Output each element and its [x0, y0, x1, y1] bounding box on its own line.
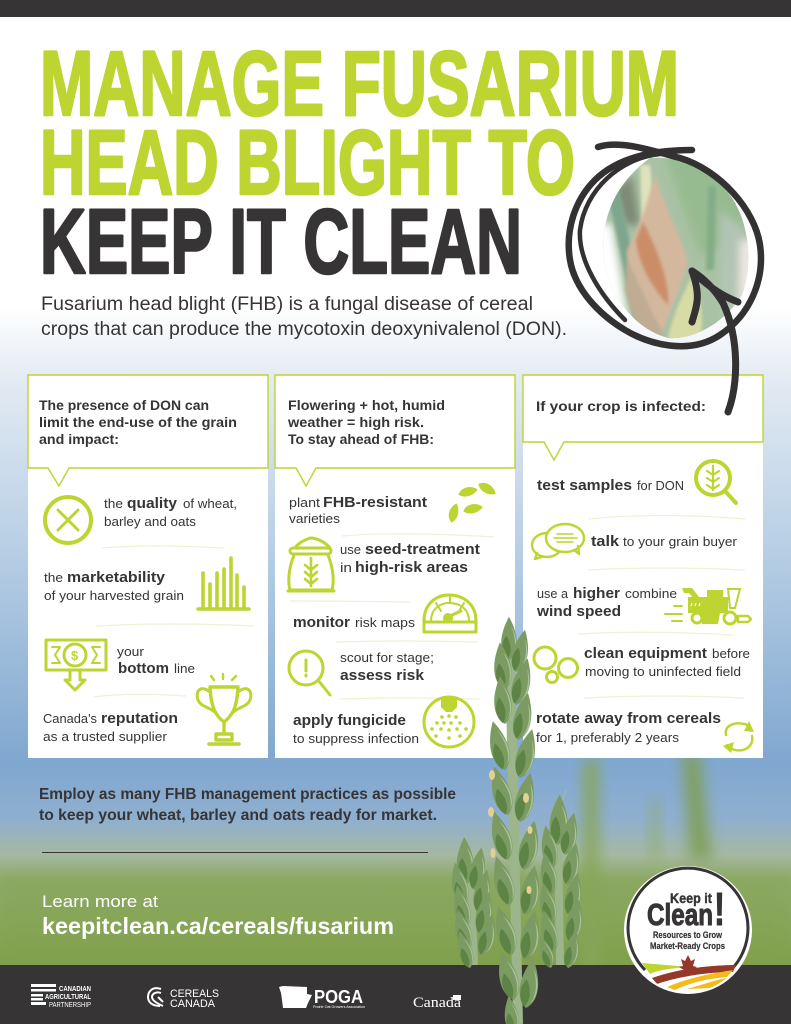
text: marketability: of your harvested grain [44, 588, 184, 603]
header text: If your crop is infected: [536, 398, 706, 414]
text: seed treatment [340, 541, 480, 576]
badge text: ! [714, 883, 725, 935]
closing statement: Employ as many FHB management practices as possible [39, 786, 456, 803]
text: resistant varieties: FHB-resistant [323, 494, 427, 511]
icon: magnifier with wheat [696, 461, 736, 503]
header text: Flowering + hot, humid [288, 397, 445, 413]
intro text [41, 294, 567, 340]
closing statement [39, 786, 456, 824]
footer logo: Canada wordmark: Canada [413, 995, 461, 1011]
text: reputation: reputation [101, 710, 178, 727]
hand-drawn circle [569, 145, 761, 346]
text: combine: higher [573, 585, 620, 602]
learn more link [42, 892, 394, 939]
intro text: crops that can produce the mycotoxin deoxynivalenol (DON). [41, 319, 567, 340]
text: bottom line [117, 644, 195, 677]
text: seed treatment: high-risk areas [355, 559, 468, 576]
icon: maple leaf [679, 955, 697, 970]
text: talk [591, 533, 738, 550]
badge: Keep it Clean [624, 866, 752, 994]
text: seed treatment: use [340, 542, 361, 557]
wheat spike: right [535, 790, 587, 970]
photo: infected wheat head [603, 158, 748, 338]
text: marketability: the [44, 570, 63, 585]
wheat spike: centre [484, 617, 544, 1024]
header text: and impact: [39, 431, 119, 447]
icon: combine harvester [665, 588, 751, 624]
panel header [28, 375, 268, 486]
text: quality: quality [127, 495, 178, 512]
title: KEEP IT CLEAN [40, 191, 522, 293]
text: reputation: as a trusted supplier [43, 729, 168, 744]
badge text: Resources to Grow [653, 930, 722, 941]
header text: To stay ahead of FHB: [288, 431, 434, 447]
text: fungicide: apply fungicide [293, 712, 406, 729]
text: quality: the [104, 496, 123, 511]
header text: limit the end-use of the grain [39, 414, 237, 430]
wheat spike: left [447, 833, 500, 970]
badge text: Keep it [670, 890, 712, 906]
text: monitor: risk maps [355, 615, 416, 630]
footer logo: Canadian Agricultural Partnership: AGRICULTURAL [45, 992, 91, 1001]
text: monitor [293, 614, 416, 631]
text: resistant varieties [289, 494, 427, 526]
footer logo: Cereals Canada [148, 988, 219, 1010]
text: seed treatment: seed-treatment [365, 541, 480, 558]
footer logo: POGA: POGA [314, 987, 363, 1007]
footer logo: POGA: Prairie Oat Growers Association [313, 1004, 365, 1009]
footer logo: Canadian Agricultural Partnership [31, 984, 91, 1009]
text: test samples: for DON [637, 478, 684, 493]
closing statement: to keep your wheat, barley and oats ready for market. [39, 807, 437, 824]
icon: bar chart [198, 558, 249, 609]
icon: seed bag [288, 538, 334, 591]
text: combine: use a [537, 586, 569, 601]
badge text [647, 883, 725, 952]
text: marketability: marketability [67, 569, 166, 586]
text: test samples: test samples [537, 477, 632, 494]
footer logo: Canadian Agricultural Partnership: PARTNERSHIP [49, 1000, 91, 1009]
icon: seeds [447, 480, 498, 524]
icon: speech bubbles [532, 524, 584, 559]
panel header [275, 375, 515, 486]
header text: weather = high risk. [287, 414, 424, 430]
text: combine: wind speed [536, 603, 621, 620]
top bar [0, 0, 791, 17]
header text [39, 397, 237, 447]
learn more link: Learn more at [42, 892, 158, 911]
arrow [692, 271, 738, 412]
text: combine: combine [625, 586, 677, 601]
learn more link: keepitclean.ca/cereals/fusarium [42, 913, 394, 939]
intro text: Fusarium head blight (FHB) is a fungal disease of cereal [41, 294, 533, 315]
text: talk: to your grain buyer [623, 534, 738, 549]
text: quality [104, 495, 237, 529]
text: reputation [43, 710, 178, 744]
text: scout: assess risk [340, 667, 425, 684]
footer logo: POGA [279, 986, 365, 1009]
hand-drawn circle and arrow [569, 145, 761, 412]
panel: impact of DON [28, 375, 268, 758]
header text [287, 397, 445, 447]
text: fungicide: to suppress infection [293, 731, 419, 746]
footer logo: Canadian Agricultural Partnership: CANADIAN [59, 984, 91, 993]
badge text: Clean [647, 897, 713, 932]
icon: trophy [197, 674, 251, 744]
text: scout: scout for stage; [340, 650, 434, 665]
footer logo: Cereals Canada: CANADA [170, 998, 216, 1010]
text: clean equipment [584, 645, 750, 679]
text: bottom line: bottom [118, 660, 169, 677]
footer bar [0, 965, 791, 1024]
badge text: Market-Ready Crops [650, 941, 725, 952]
text: seed treatment: in [340, 560, 352, 575]
text: rotate: for 1, preferably 2 years [536, 730, 680, 745]
icon: gauge [424, 595, 476, 632]
text: monitor: monitor [293, 614, 350, 631]
text: rotate [536, 710, 721, 745]
icon: money with down arrow: $ [71, 648, 79, 663]
text: reputation: Canada's [43, 711, 97, 726]
text: clean equipment: clean equipment [584, 645, 707, 662]
text: scout [340, 650, 434, 684]
icon: rotate arrows [723, 721, 754, 753]
text: test samples [537, 477, 684, 494]
icon: money with down arrow [46, 640, 106, 690]
text: resistant varieties: varieties [289, 511, 341, 526]
text: talk: talk [591, 533, 620, 550]
text: bottom line: your [117, 644, 145, 659]
panel: if your crop is infected [523, 375, 763, 758]
text: fungicide [293, 712, 419, 746]
panel: stay ahead of FHB [275, 375, 515, 758]
icon: fungicide spray [424, 697, 474, 747]
title [40, 33, 679, 293]
footer logo: Cereals Canada: CEREALS [170, 988, 219, 1000]
badge landscape [642, 963, 736, 990]
icon: crossed circle [45, 497, 91, 543]
icon: magnifier with exclamation [289, 651, 330, 695]
text: clean equipment: before [712, 646, 750, 661]
text: clean equipment: moving to uninfected field [585, 664, 741, 679]
text: bottom line: line [174, 661, 195, 676]
panel header [523, 375, 763, 460]
text: quality: barley and oats [104, 514, 197, 529]
header text: The presence of DON can [39, 397, 209, 413]
text: combine [536, 585, 677, 620]
text: rotate: rotate away from cereals [536, 710, 721, 727]
text: marketability [44, 569, 184, 603]
icon: bubbles [534, 647, 578, 682]
text: quality: of wheat, [183, 496, 237, 511]
text: resistant varieties: plant [289, 495, 320, 510]
